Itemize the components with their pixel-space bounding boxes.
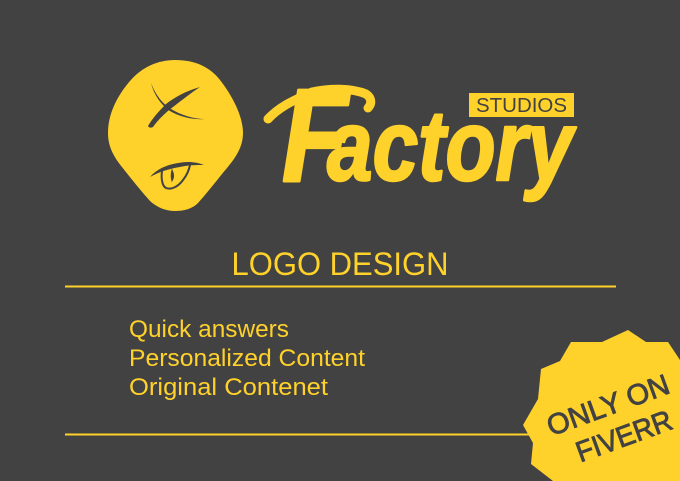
text block: feature list: Quick answers (129, 316, 289, 343)
text block: feature list: Original Contenet (129, 374, 328, 401)
heading: LOGO DESIGN: LOGO DESIGN (232, 246, 448, 282)
badge: only on Fiverr (523, 330, 680, 481)
top divider line (65, 286, 616, 288)
wordmark: Factory (268, 62, 577, 209)
wordmark swash on F (268, 89, 371, 119)
icon: yellow face logo (108, 60, 243, 211)
label: STUDIOS box: STUDIOS (476, 95, 567, 117)
bottom divider line (65, 434, 535, 436)
wordmark letter F: F (282, 62, 351, 209)
text block: feature list (129, 316, 365, 401)
text block: feature list: Personalized Content (129, 345, 365, 372)
wordmark letters actory: actory (327, 90, 577, 202)
badge: only on Fiverr: ONLY ON (543, 369, 674, 443)
badge: only on Fiverr: FIVERR (572, 405, 677, 469)
